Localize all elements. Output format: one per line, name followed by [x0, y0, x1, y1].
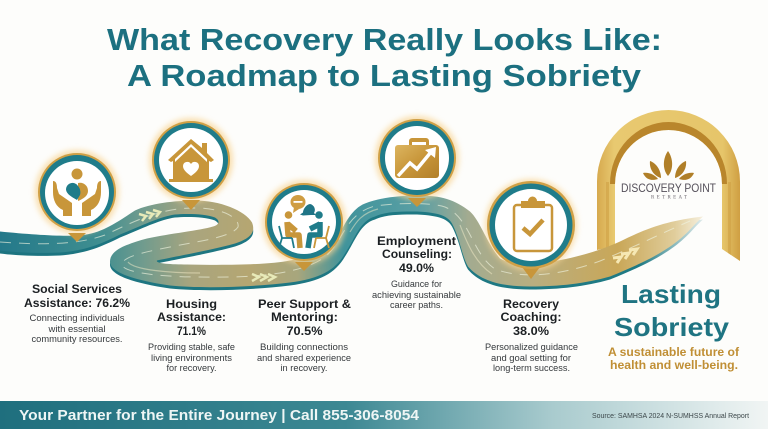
pin: housing [149, 118, 233, 210]
logo: Discovery Point Retreat: RETREAT [651, 196, 687, 200]
text block: peer support: in recovery. [280, 363, 328, 373]
text block: recovery coaching: and goal setting for [491, 353, 571, 363]
icon: caring hands [53, 168, 101, 216]
text block: peer support: Building connections [260, 342, 349, 352]
text block: peer support: 70.5% [286, 324, 323, 338]
winding road [0, 196, 703, 290]
speech bubbles [290, 195, 317, 216]
title: A Roadmap to Lasting Sobriety [127, 58, 642, 93]
footer source: Source: SAMHSA 2024 N-SUMHSS Annual Report [592, 413, 749, 420]
road edge rim [0, 198, 703, 290]
lane dashes [0, 204, 690, 277]
text block: lasting sobriety subtitle: health and well-being. [610, 360, 738, 372]
text block: housing: for recovery. [166, 363, 216, 373]
title: What Recovery Really Looks Like: [107, 22, 662, 57]
text block: employment: career paths. [390, 300, 443, 310]
logo leaves [643, 151, 694, 180]
title [107, 22, 662, 93]
pin: peer support [262, 180, 346, 271]
pin: employment [375, 116, 459, 207]
text block: lasting sobriety subtitle [608, 347, 739, 372]
text block: employment: 49.0% [399, 261, 434, 275]
text block: recovery coaching: Recovery [503, 297, 559, 311]
text block: employment: Employment [377, 234, 456, 248]
text block: social services [24, 282, 130, 344]
logo: Discovery Point Retreat: DISCOVERY POINT [621, 181, 717, 195]
text block: housing: 71.1% [177, 324, 206, 338]
heading: lasting sobriety [614, 279, 730, 342]
text block: social services: with essential [47, 324, 106, 334]
logo: Discovery Point Retreat [621, 151, 717, 200]
text block: recovery coaching: Coaching: [500, 310, 562, 324]
text block: employment [372, 234, 461, 310]
text block: recovery coaching: Personalized guidance [485, 342, 578, 352]
text block: recovery coaching: long-term success. [493, 363, 570, 373]
icon: briefcase with arrow [395, 138, 439, 178]
road surface [0, 196, 703, 287]
text block: peer support: Mentoring: [271, 310, 338, 324]
text block: peer support: Peer Support & [258, 297, 351, 311]
footer bar [0, 401, 768, 429]
text block: employment: achieving sustainable [372, 290, 461, 300]
text block: social services: community resources. [32, 334, 122, 344]
text block: social services: Assistance: 76.2% [24, 296, 130, 310]
chevrons [139, 210, 637, 281]
finish arch [597, 110, 740, 261]
pin: social services [35, 150, 119, 242]
pin: recovery coaching [485, 179, 577, 279]
text block: recovery coaching [485, 297, 578, 373]
text block: housing: Assistance: [157, 310, 226, 324]
text block: housing: living environments [151, 353, 233, 363]
text block: peer support [257, 297, 351, 373]
icon: clipboard with check [514, 196, 552, 251]
text block: recovery coaching: 38.0% [513, 324, 549, 338]
heading: lasting sobriety: Lasting [621, 279, 721, 309]
text block: social services: Social Services [32, 282, 122, 296]
text block: lasting sobriety subtitle: A sustainable future of [608, 347, 739, 359]
icon: house with heart [168, 139, 214, 182]
text block: peer support: and shared experience [257, 353, 351, 363]
footer call to action: Your Partner for the Entire Journey | Call 855-306-8054 [19, 408, 419, 424]
text block: social services: Connecting individuals [30, 313, 125, 323]
text block: employment: Counseling: [382, 247, 452, 261]
text block: housing [148, 297, 235, 373]
text block: employment: Guidance for [391, 279, 442, 289]
edge lines [128, 209, 492, 274]
heading: lasting sobriety: Sobriety [614, 312, 730, 342]
text block: housing: Housing [166, 297, 217, 311]
icon: two people talking [279, 195, 329, 248]
text block: housing: Providing stable, safe [148, 342, 235, 352]
